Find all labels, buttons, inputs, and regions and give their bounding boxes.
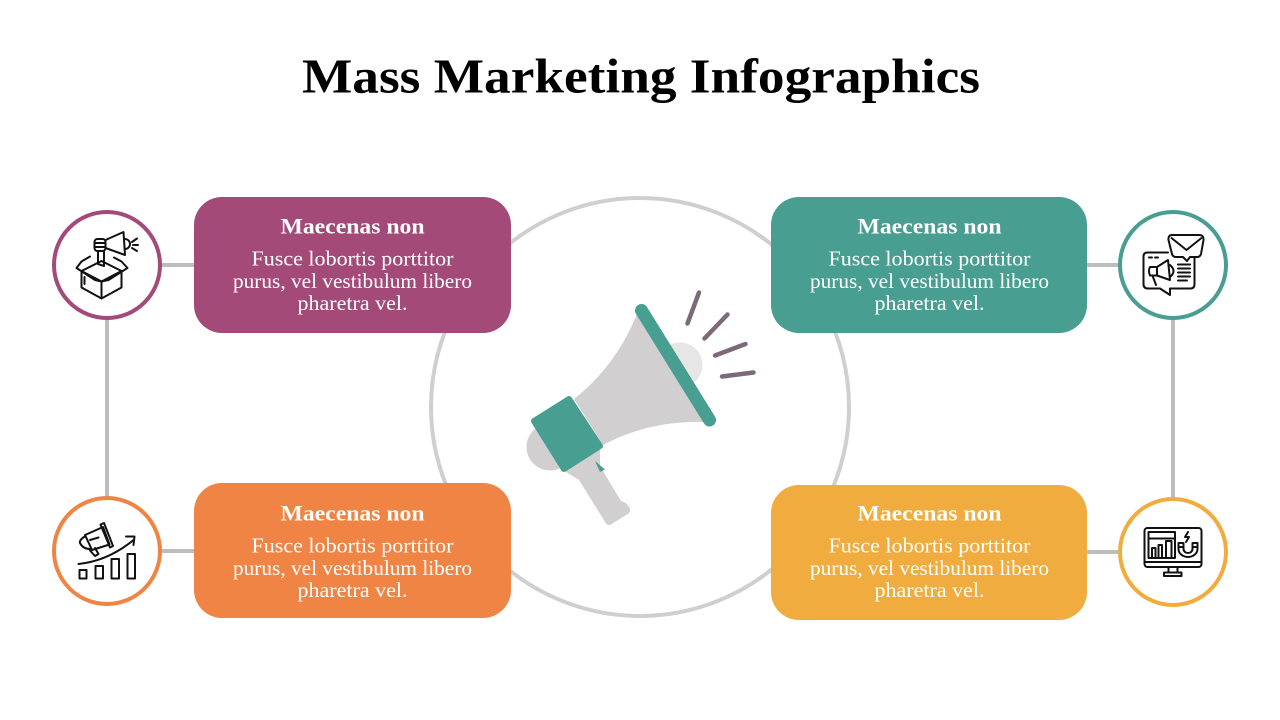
panel: teal (771, 197, 1087, 333)
connector lines (107, 265, 1173, 552)
title: Mass Marketing Infographics (302, 48, 980, 104)
icon: monitor with chart and magnet (1120, 499, 1226, 605)
panel: purple: pharetra vel. (298, 291, 408, 315)
icon: central megaphone (526, 292, 754, 525)
panel: teal: Maecenas non (858, 214, 1002, 238)
panel: yellow: Fusce lobortis porttitor (828, 534, 1030, 558)
panel: purple (194, 197, 511, 333)
sound rays (688, 292, 754, 376)
panel: yellow (771, 485, 1087, 620)
icon: chat bubble with megaphone and envelope (1120, 212, 1226, 318)
central ring (431, 198, 849, 616)
icon: megaphone with growth bars (54, 498, 160, 604)
panel: purple: purus, vel vestibulum libero (233, 269, 472, 293)
panel: orange: purus, vel vestibulum libero (233, 556, 472, 580)
panel: purple: Fusce lobortis porttitor (252, 246, 454, 270)
panel: orange (194, 483, 511, 618)
panel: yellow: purus, vel vestibulum libero (810, 556, 1049, 580)
icon: box with megaphone (54, 212, 160, 318)
panel: yellow: Maecenas non (858, 500, 1002, 526)
panel: yellow: pharetra vel. (874, 578, 984, 602)
panel: orange: Maecenas non (280, 500, 424, 526)
panel: teal: Fusce lobortis porttitor (828, 246, 1030, 270)
panel: teal: pharetra vel. (874, 291, 984, 315)
panel: teal: purus, vel vestibulum libero (810, 269, 1049, 293)
panel: purple: Maecenas non (280, 214, 424, 238)
panel: orange: pharetra vel. (298, 578, 408, 602)
panel: orange: Fusce lobortis porttitor (252, 534, 454, 558)
